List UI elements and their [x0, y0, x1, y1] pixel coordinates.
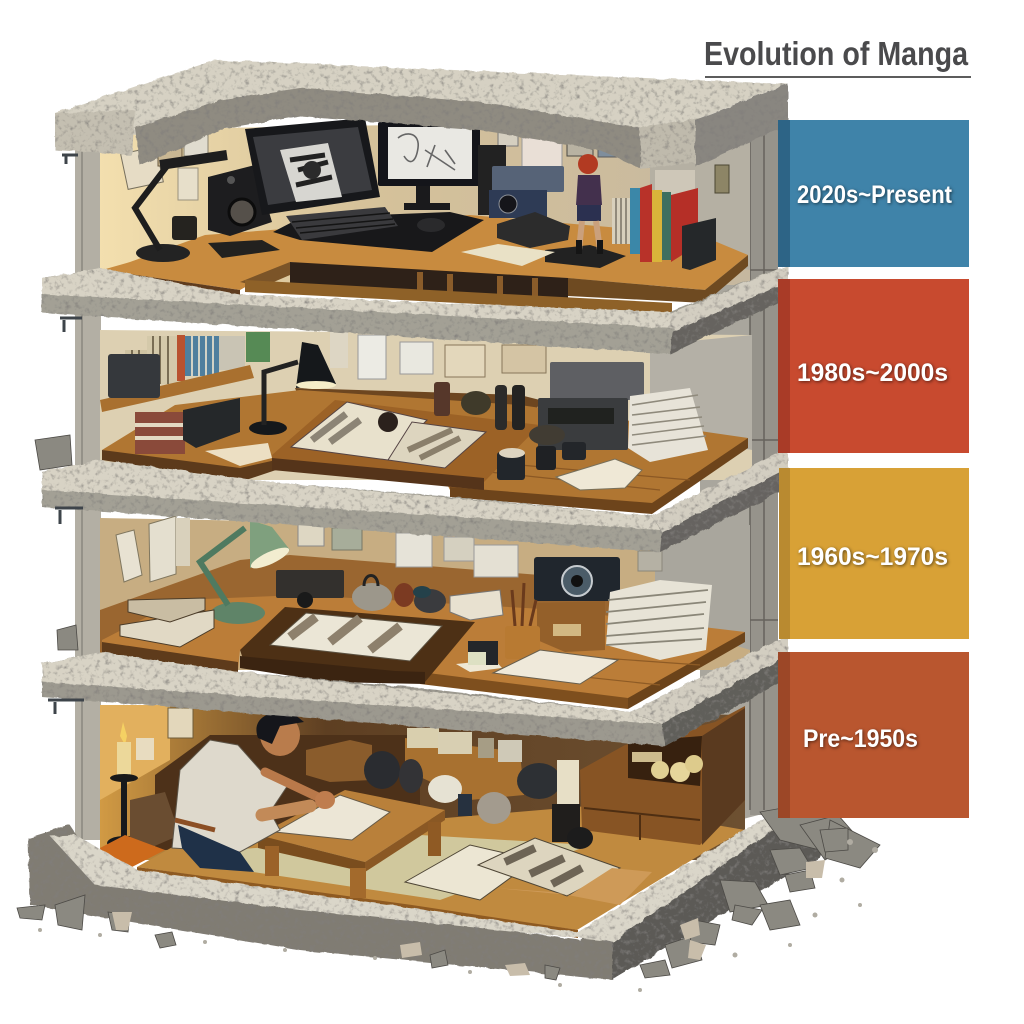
cup of pens	[172, 216, 197, 240]
speaker	[208, 165, 272, 236]
back wall	[100, 330, 752, 480]
kettle and bottles	[458, 792, 511, 824]
wooden box	[537, 601, 605, 652]
printer stack	[538, 362, 644, 450]
panel: pre-1950s	[778, 652, 969, 818]
paper stack	[628, 388, 708, 462]
open book	[461, 244, 555, 266]
wall papers	[330, 332, 546, 379]
floor slab 3	[42, 635, 788, 746]
floor	[137, 805, 745, 938]
manga pages	[270, 613, 442, 661]
roof side face	[695, 84, 788, 166]
ink stand	[456, 641, 502, 672]
title: Evolution of Manga	[704, 35, 969, 72]
mugs and small items	[497, 425, 586, 480]
candle glow wall	[100, 705, 170, 800]
back wood panel	[295, 388, 540, 430]
roof left block	[55, 110, 135, 155]
stacked books	[120, 598, 214, 647]
panel: 1960s to 1970s: 1960s~1970s	[797, 543, 948, 571]
desk lamp	[135, 155, 227, 262]
wall note	[168, 708, 193, 738]
panel: 1980s to 2000s	[778, 279, 969, 453]
panel: 2020s to present: 2020s~Present	[797, 181, 953, 209]
right concrete wall	[700, 115, 778, 830]
wall papers	[116, 516, 662, 582]
cushions	[130, 792, 180, 848]
stacked newspapers	[405, 838, 652, 905]
drawing tablet and keyboard	[273, 207, 484, 252]
room 2: 1980s to 2000s	[100, 330, 752, 514]
ink items	[552, 804, 593, 849]
seated artist	[172, 712, 335, 872]
ceramic pots	[364, 751, 579, 805]
scanner and camera	[489, 166, 570, 248]
paper pile small	[450, 590, 503, 620]
roof torn underside	[135, 88, 640, 168]
loose papers	[556, 459, 642, 490]
desk lamp	[249, 342, 336, 435]
foundation base	[28, 805, 830, 980]
right side wall	[650, 135, 750, 270]
floor slab 1	[42, 265, 788, 354]
wall notes	[121, 122, 729, 230]
loose papers	[493, 650, 618, 684]
desk	[102, 595, 745, 709]
note with pen	[205, 443, 272, 466]
radio camera	[276, 570, 344, 608]
ink bottles	[434, 382, 525, 430]
roof slab	[55, 60, 788, 169]
back wall	[100, 705, 745, 860]
book row	[612, 184, 716, 270]
back wall	[100, 518, 750, 670]
large monitor	[245, 118, 380, 215]
room 3: 1960s to 1970s	[100, 516, 750, 709]
panel: 1960s to 1970s	[779, 468, 969, 639]
tower behind monitor	[478, 145, 506, 215]
panel: 1980s to 2000s: 1980s~2000s	[797, 359, 948, 387]
left concrete columns	[75, 140, 101, 840]
wooden cabinet	[580, 706, 745, 845]
wainscot panel	[100, 555, 620, 660]
mobile device	[208, 240, 280, 258]
floor slab 2	[42, 448, 788, 552]
rubble piles	[17, 435, 880, 992]
film camera	[534, 557, 620, 601]
green desk lamp	[200, 520, 292, 624]
roof top surface	[55, 60, 788, 135]
drafting table	[272, 400, 540, 490]
back wall	[100, 120, 750, 285]
room 4: pre-1950s	[100, 705, 745, 938]
shelf with books	[100, 332, 270, 412]
desk	[102, 215, 748, 314]
orange floor mat	[100, 835, 165, 868]
manga page on table	[275, 795, 390, 840]
back shelf pieces	[306, 728, 524, 800]
panel: pre-1950s: Pre~1950s	[803, 725, 918, 753]
stacked books and device	[135, 398, 240, 454]
paper stack	[606, 580, 712, 660]
low table	[258, 790, 445, 898]
panel: 2020s to present	[778, 120, 969, 267]
open manga pages	[291, 402, 486, 468]
roof right block	[640, 118, 700, 169]
wall brackets	[48, 155, 84, 714]
room 1: 2020s to present	[100, 118, 750, 314]
kettle and pots	[352, 576, 446, 613]
pencil cup	[505, 583, 540, 659]
desk	[102, 390, 748, 514]
second monitor	[378, 122, 480, 210]
drafting table	[240, 607, 475, 684]
candle	[107, 722, 143, 850]
figurine	[545, 154, 626, 268]
